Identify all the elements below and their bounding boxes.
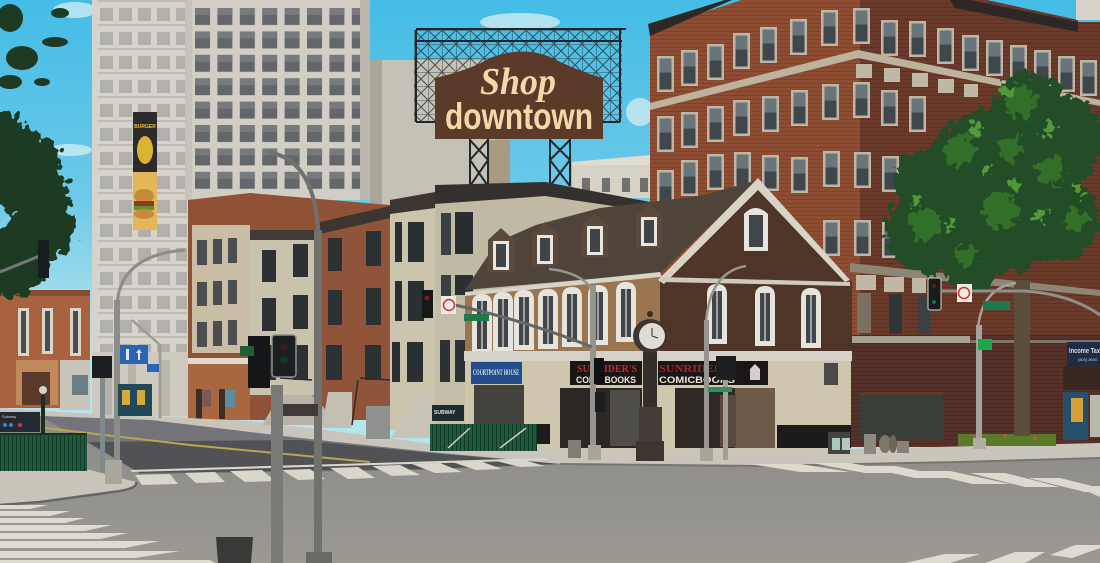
corner building roof xyxy=(465,180,758,296)
planter flowers xyxy=(958,434,1056,446)
subway entrance centre xyxy=(430,405,537,451)
left mast arm and traffic light xyxy=(0,240,49,278)
tall street lamp xyxy=(268,152,332,563)
cross street xyxy=(40,416,560,474)
far sidewalk xyxy=(0,408,1100,466)
top-left foliage xyxy=(0,4,69,89)
crosswalk: far centre xyxy=(130,458,548,485)
left lamp posts and signal xyxy=(92,250,185,484)
grey building behind billboard xyxy=(370,60,510,205)
subway entrance centre: SUBWAY xyxy=(434,410,456,416)
billboard sign: Shop downtown: downtown xyxy=(445,96,593,137)
brick base of highrise xyxy=(850,335,1100,447)
shadowed cross street xyxy=(88,440,560,473)
billboard sign: Shop downtown xyxy=(435,51,603,139)
street clock xyxy=(633,311,667,461)
crosswalk: bottom-left xyxy=(0,505,215,563)
trash bins xyxy=(568,432,850,458)
right-centre poles xyxy=(700,266,746,461)
tower billboard poster: BURGER xyxy=(134,124,156,130)
sign: Courtpoint House: COURTPOINT HOUSE xyxy=(473,368,519,377)
left tree xyxy=(0,110,74,298)
corner building shop floor xyxy=(464,351,852,450)
crosswalk: far right xyxy=(750,463,1100,497)
sign: Sunrider's Comicbooks left: SUNRIDER'S xyxy=(577,364,637,375)
corner building upper facade xyxy=(465,178,852,355)
sign: Courtpoint House xyxy=(471,362,522,384)
clouds xyxy=(48,2,654,156)
far white building xyxy=(572,155,652,198)
bottom-left corner sidewalk xyxy=(0,468,136,505)
foreground signal xyxy=(240,335,318,563)
tower billboard poster xyxy=(133,112,157,230)
newspaper boxes xyxy=(118,384,152,416)
office tower xyxy=(92,0,370,418)
brick highrise right xyxy=(648,0,1100,445)
sign: Sunrider's Comicbooks left xyxy=(570,361,642,385)
right shop sign and awning xyxy=(1063,342,1100,440)
subway entrance left xyxy=(0,386,87,471)
right shop sign and awning: (800) 8000 xyxy=(1078,357,1098,362)
sign: Sunrider's Comicbooks left: COMICBOOKS xyxy=(576,375,636,385)
trash bags xyxy=(864,434,909,454)
sign: Sunrider's Comicbooks right: SUNRIDER'S xyxy=(659,364,734,375)
stoop stairs xyxy=(262,378,432,439)
blue signs xyxy=(120,345,159,372)
billboard sign: Shop downtown: Shop xyxy=(480,61,556,103)
sign: Sunrider's Comicbooks right: COMICBOOKS xyxy=(659,375,735,385)
road surface xyxy=(0,416,1100,563)
crosswalk: bottom-right xyxy=(905,545,1100,563)
subway entrance left: Subway xyxy=(2,414,16,419)
centre signal pole and mast arm xyxy=(422,269,605,460)
brownstone row xyxy=(188,192,440,430)
right lamp and mast arm xyxy=(928,278,1100,449)
trash can foreground xyxy=(216,537,253,563)
rear beige building with dark cornice xyxy=(435,182,650,440)
right tree xyxy=(885,72,1100,436)
yellow centre line xyxy=(45,428,370,462)
billboard frame xyxy=(414,29,626,186)
sign: Sunrider's Comicbooks right xyxy=(658,361,768,385)
curb line right xyxy=(560,458,1100,466)
far-left brick building xyxy=(0,290,90,410)
